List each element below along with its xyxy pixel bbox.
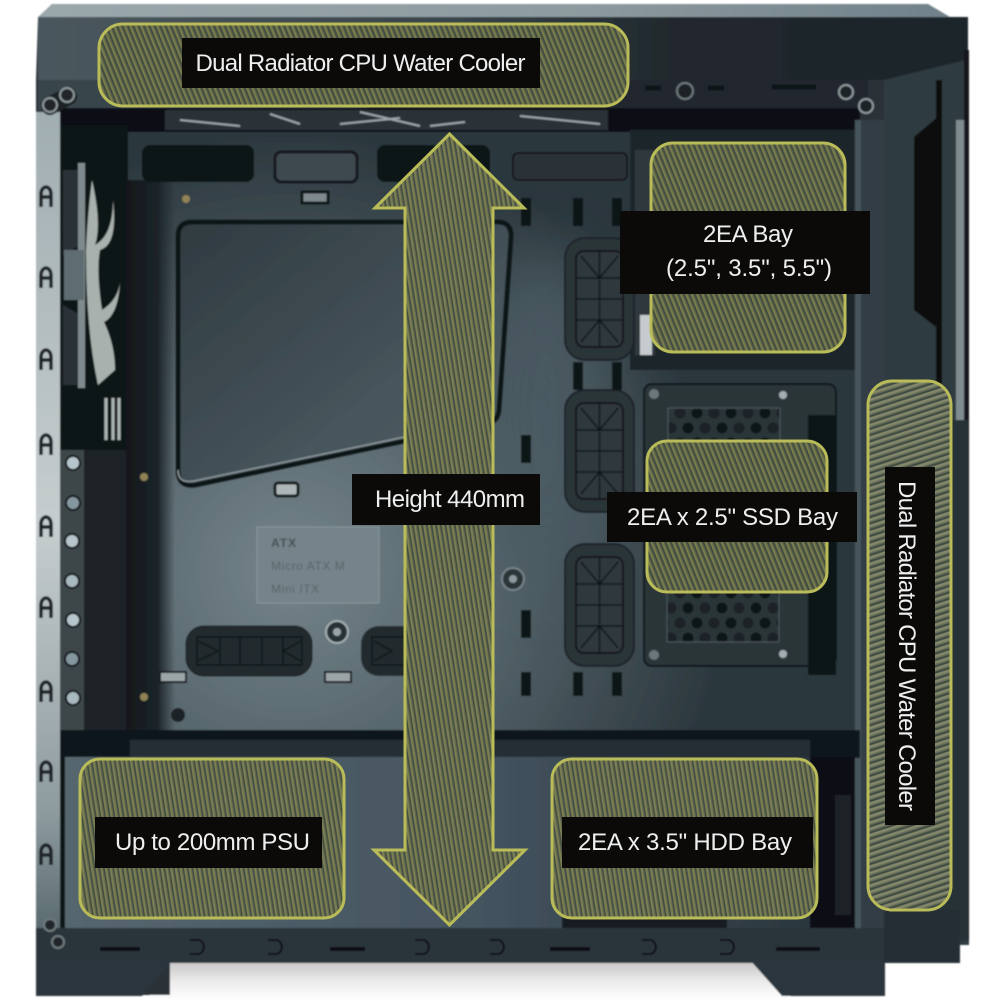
label: SSD bay: 2EA x 2.5" SSD Bay (627, 504, 838, 531)
floor shadow (150, 963, 790, 1000)
label: top water cooler (182, 38, 540, 88)
PCI slots (60, 450, 126, 730)
left dark column (60, 125, 128, 735)
panel screws and tabs (140, 192, 351, 722)
top light edge (38, 4, 950, 17)
top cutouts (142, 145, 254, 182)
psu shroud (65, 757, 810, 929)
vertical slots (521, 198, 622, 696)
label: height: Height 440mm (375, 486, 525, 513)
highlight: PSU area (80, 759, 344, 918)
label: top water cooler: Dual Radiator CPU Water Cooler (196, 50, 526, 77)
label: 2EA bay: (2.5", 3.5", 5.5") (666, 255, 832, 282)
mid shelf (60, 730, 860, 758)
fan (63, 163, 120, 440)
motherboard window (178, 222, 511, 485)
label: HDD bay: 2EA x 3.5" HDD Bay (578, 829, 792, 856)
top panel (38, 17, 968, 80)
top dark band (60, 108, 860, 132)
label: 2EA bay (620, 211, 870, 294)
highlight: side radiator area (868, 381, 951, 910)
ATX plate: ATX (271, 536, 297, 550)
label: PSU: Up to 200mm PSU (115, 829, 310, 856)
panel mid glow (475, 250, 615, 590)
label: HDD bay (562, 817, 813, 868)
highlight: 2EA bay area (651, 143, 845, 352)
feet (36, 960, 885, 996)
right chassis rail (855, 120, 884, 940)
label: side water cooler (885, 467, 935, 825)
top rail (38, 80, 868, 110)
highlight: HDD bay area (552, 759, 817, 918)
bottom horizontal grommets (186, 626, 421, 676)
label: SSD bay (607, 492, 857, 542)
highlight: SSD bay area (647, 441, 827, 592)
upper right darkness (630, 130, 860, 370)
ATX plate: Mini ITX (271, 582, 320, 596)
front panel (884, 17, 969, 963)
ATX plate: Micro ATX M (271, 559, 345, 573)
interior shadow (60, 108, 860, 938)
bottom rail (36, 928, 884, 963)
arrow: case height double arrow (374, 134, 525, 925)
highlight: top radiator area (99, 24, 628, 106)
drive cage plate (644, 384, 836, 675)
top fan glimpse (165, 110, 608, 130)
label: height (352, 474, 540, 525)
left rail (36, 112, 60, 940)
chassis screws (38, 83, 873, 948)
label: PSU (95, 817, 322, 868)
back panel (128, 130, 860, 735)
label: 2EA bay: 2EA Bay (703, 221, 793, 248)
ATX plate (257, 527, 379, 603)
label: side water cooler: Dual Radiator CPU Water Cooler (893, 481, 920, 811)
right vertical grommets (565, 238, 634, 666)
